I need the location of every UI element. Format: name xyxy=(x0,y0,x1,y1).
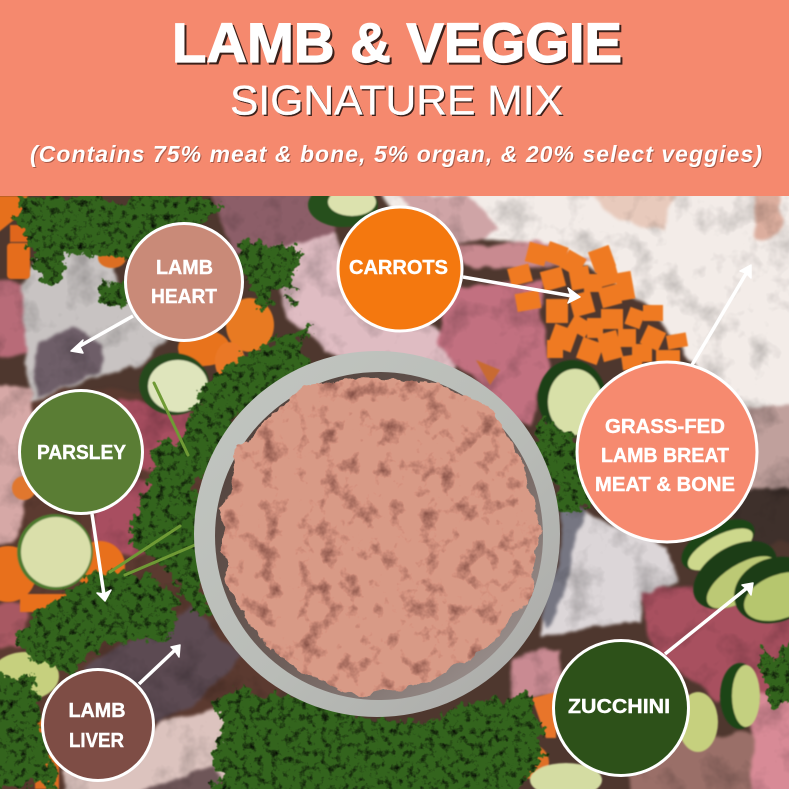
callout: lamb liver: LAMB xyxy=(68,700,126,722)
arrow: lamb heart xyxy=(71,316,133,353)
arrow: grass-fed lamb xyxy=(692,265,751,365)
title: LAMB & VEGGIE xyxy=(174,13,624,76)
arrow: lamb liver xyxy=(139,645,180,684)
arrow: parsley xyxy=(92,514,111,601)
callout: lamb heart: LAMB xyxy=(156,257,213,279)
callout: grass-fed lamb breast xyxy=(577,362,757,542)
callout: lamb liver: LIVER xyxy=(69,730,125,752)
callout: lamb liver xyxy=(42,670,154,780)
subtitle: SIGNATURE MIX xyxy=(230,76,563,124)
callout: lamb heart xyxy=(126,224,242,340)
callout: grass-fed lamb breast: GRASS-FED xyxy=(605,416,725,438)
parsley stems xyxy=(110,383,195,575)
subtitle: SIGNATURE MIX xyxy=(232,78,564,125)
composition note: (Contains 75% meat & bone, 5% organ, & 20% select veggies) xyxy=(30,141,762,167)
food photo background xyxy=(0,180,789,789)
parsley xyxy=(0,196,789,789)
bowl xyxy=(194,351,560,717)
callout: grass-fed lamb breast: MEAT & BONE xyxy=(595,474,735,496)
callout: parsley: PARSLEY xyxy=(37,442,127,464)
meat mix in bowl xyxy=(222,378,540,696)
composition note: (Contains 75% meat & bone, 5% organ, & 20% select veggies) xyxy=(31,142,763,168)
callout: carrots: CARROTS xyxy=(349,257,448,279)
header panel xyxy=(0,0,789,196)
title: LAMB & VEGGIE xyxy=(172,11,622,74)
callout: lamb heart: HEART xyxy=(151,286,217,308)
carrots and zucchini slices xyxy=(0,196,28,235)
callout: zucchini xyxy=(554,640,688,776)
arrow: zucchini xyxy=(665,583,753,654)
arrow: carrots xyxy=(463,277,580,303)
callout: zucchini: ZUCCHINI xyxy=(568,696,670,718)
diced carrots xyxy=(507,241,688,370)
callout: parsley xyxy=(20,390,142,514)
callout: grass-fed lamb breast: LAMB BREAT xyxy=(601,445,729,467)
callout: carrots xyxy=(338,207,462,331)
